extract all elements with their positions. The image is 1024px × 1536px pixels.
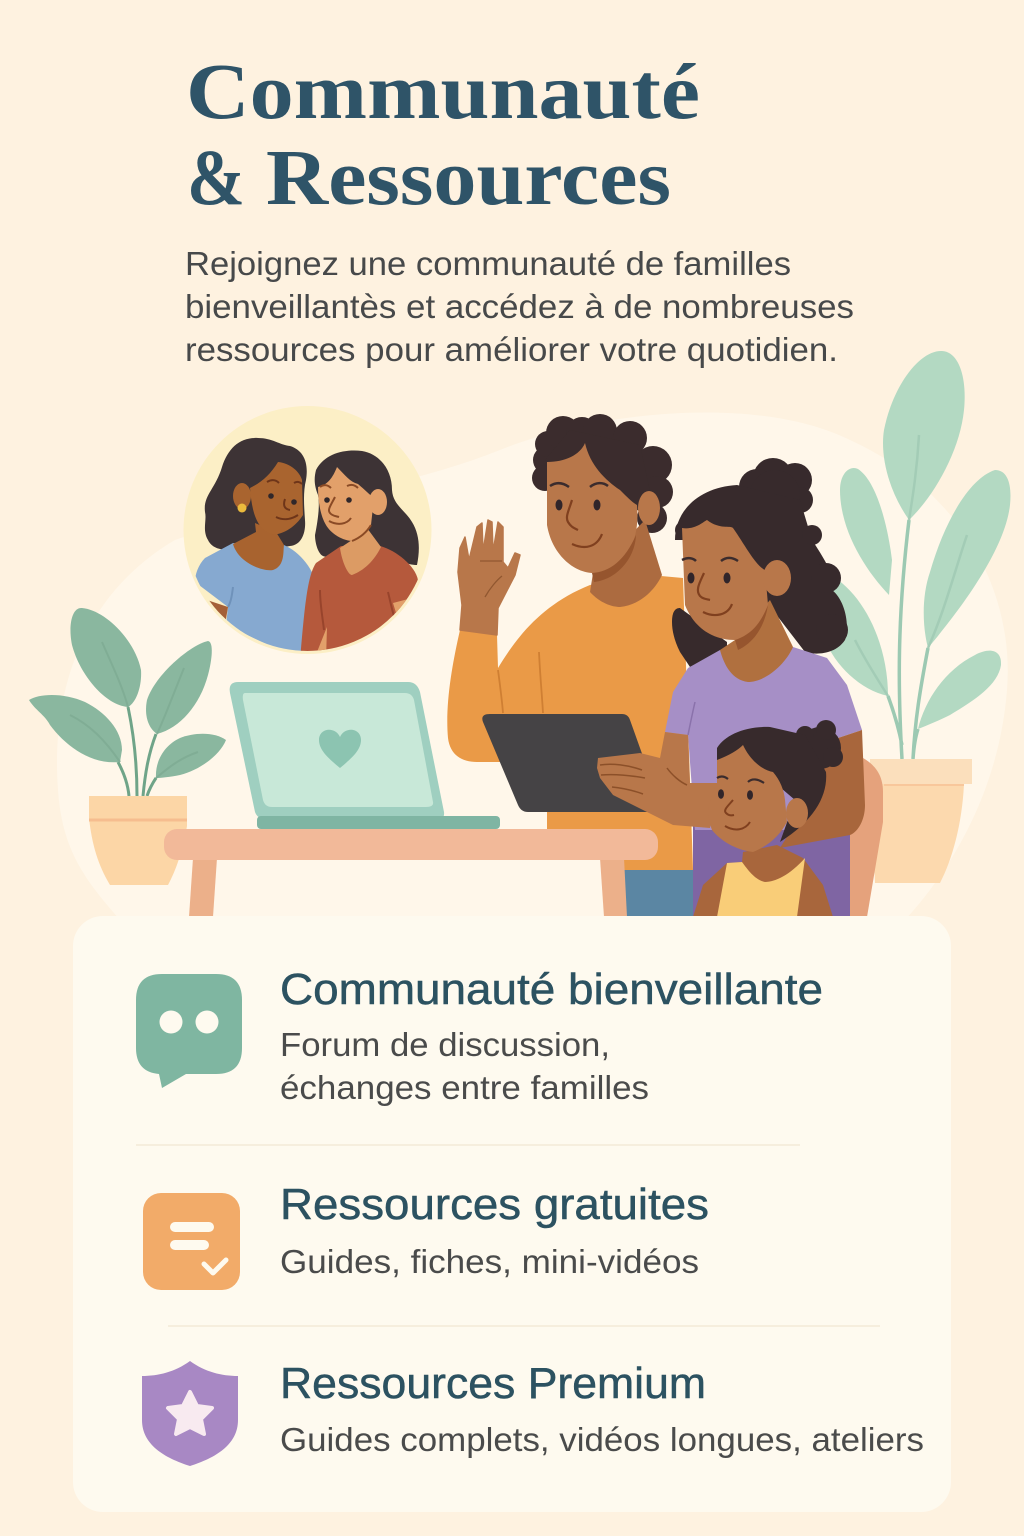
right woman (300, 451, 420, 660)
intro text: Rejoignez une communauté de familles (185, 245, 791, 282)
chair (838, 758, 883, 917)
woman hair (672, 458, 848, 667)
man sweater (447, 575, 693, 870)
video call bubble (184, 406, 432, 660)
man hand (458, 520, 520, 635)
title: Communauté (186, 49, 700, 136)
heading: ressources premium: Ressources Premium (280, 1359, 706, 1408)
man waving (447, 414, 695, 917)
woman neck (720, 600, 793, 682)
tablet (482, 714, 655, 812)
girl hair (717, 720, 843, 842)
man hair (532, 414, 673, 533)
man face (547, 443, 637, 573)
heading: communauté: Communauté bienveillante (280, 965, 823, 1014)
text: communauté (280, 1026, 649, 1106)
left woman (195, 438, 318, 660)
woman face (682, 520, 768, 640)
icon: left plant (29, 608, 226, 885)
man neck (590, 520, 662, 607)
intro text (185, 245, 854, 368)
woman top (665, 647, 862, 830)
woman (597, 458, 883, 917)
panel: features (73, 916, 951, 1512)
text: ressources gratuites: Guides, fiches, mini-vidéos (280, 1243, 699, 1280)
icon: right plant (820, 351, 1010, 883)
intro text: ressources pour améliorer votre quotidien. (185, 331, 838, 368)
girl dress (717, 858, 805, 917)
laptop (230, 682, 500, 829)
woman arm and hand (597, 732, 717, 828)
table (164, 829, 658, 917)
girl face (709, 745, 787, 852)
icon: chat bubble (136, 974, 242, 1088)
text: communauté: échanges entre familles (280, 1069, 649, 1106)
text: ressources premium: Guides complets, vidéos longues, ateliers (280, 1421, 924, 1458)
title: & (187, 135, 245, 222)
plant pot (89, 796, 187, 885)
heading: ressources gratuites: Ressources gratuites (280, 1180, 709, 1229)
title (186, 49, 700, 222)
intro text: bienveillantès et accédez à de nombreuses (185, 288, 854, 325)
woman right arm (780, 730, 865, 848)
girl shoulders (693, 845, 833, 917)
plant pot (870, 759, 972, 883)
title: Ressources (266, 135, 671, 222)
girl (693, 720, 843, 917)
icon: document (143, 1193, 240, 1290)
icon: shield star (142, 1361, 238, 1466)
text: communauté: Forum de discussion, (280, 1026, 610, 1063)
